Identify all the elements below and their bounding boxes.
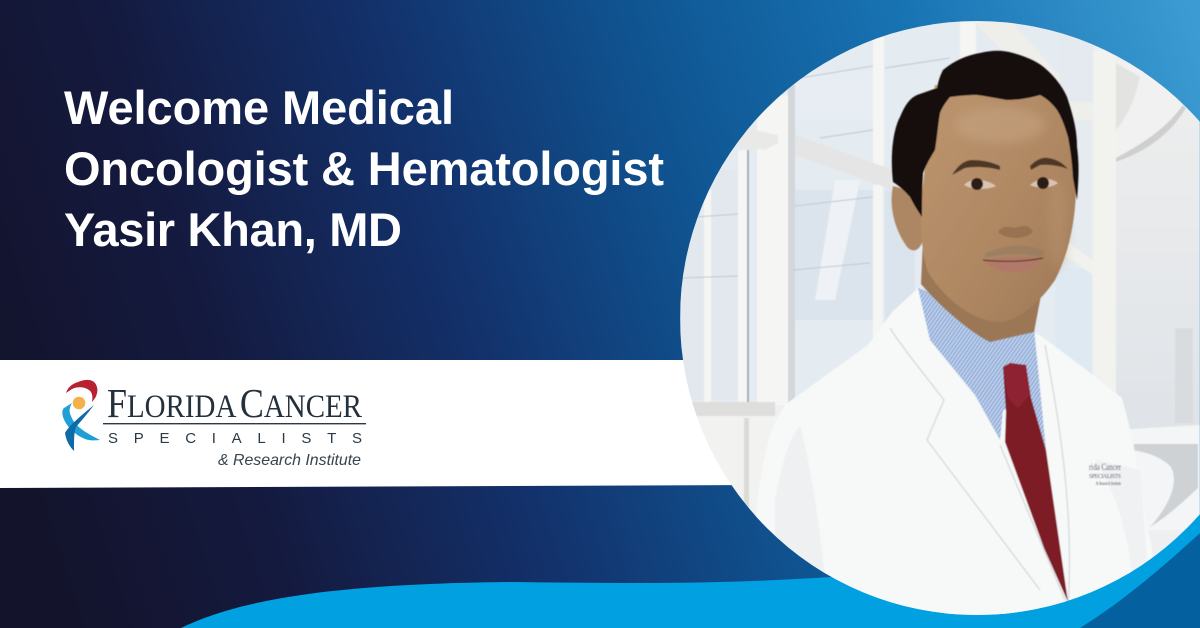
light blue ribbon (62, 403, 100, 440)
window panes (796, 180, 914, 319)
eyes (964, 180, 996, 189)
window divider (788, 85, 795, 405)
window mullions (704, 20, 976, 410)
eyebrows (952, 160, 1000, 175)
face shading (1056, 226, 1072, 271)
logo specialists: SPECIALISTS (108, 430, 362, 447)
coat shading (775, 425, 828, 620)
doctor head (892, 51, 1078, 342)
circular doctor photo (680, 20, 1200, 620)
ceiling (1116, 60, 1200, 162)
hair (892, 51, 1078, 217)
nose shadow (998, 226, 1033, 238)
pillar (1093, 50, 1116, 435)
heading line 1: Welcome Medical (64, 81, 454, 134)
neck (921, 240, 1042, 342)
white logo band (0, 360, 760, 488)
heading (64, 81, 664, 256)
top diagonal beam (977, 21, 1080, 120)
moustache shadow (985, 246, 1045, 258)
shirt and collar (918, 288, 1046, 450)
coat embroidered logo: rida Cancer (1089, 462, 1121, 472)
red arc (66, 380, 97, 402)
logo research institute: & Research Institute (218, 452, 361, 469)
left window glass (680, 20, 1080, 405)
lips (985, 258, 1041, 272)
floor (1130, 425, 1200, 440)
logo wordmark: FLORIDACANCER (107, 380, 362, 426)
arched window (1075, 120, 1092, 260)
logo icon: ribbon figure (62, 380, 100, 451)
lapel outlines (890, 328, 1069, 605)
right wall (1116, 302, 1200, 429)
necktie (1003, 363, 1068, 602)
photo backdrop (680, 20, 1200, 620)
coat embroidered logo: SPECIALISTS (1089, 474, 1121, 480)
doctor white coat (754, 288, 1152, 620)
coat embroidered logo (1089, 462, 1121, 487)
Florida Cancer Specialists logo (62, 380, 366, 469)
ear (892, 186, 926, 250)
bottom light blue wave (181, 500, 1200, 628)
bottom right dark blue corner (1080, 533, 1200, 628)
dark blue ribbon (65, 405, 94, 451)
coat embroidered logo: & Research Institute (1096, 481, 1121, 487)
orange head (73, 397, 85, 409)
window shadow lines (682, 58, 950, 402)
diagonal beam (795, 135, 893, 190)
window sill (692, 402, 775, 416)
face (921, 85, 1076, 322)
heading line 3: Yasir Khan, MD (64, 203, 402, 256)
logo rule (103, 423, 366, 424)
heading line 2: Oncologist & Hematologist (64, 142, 664, 195)
